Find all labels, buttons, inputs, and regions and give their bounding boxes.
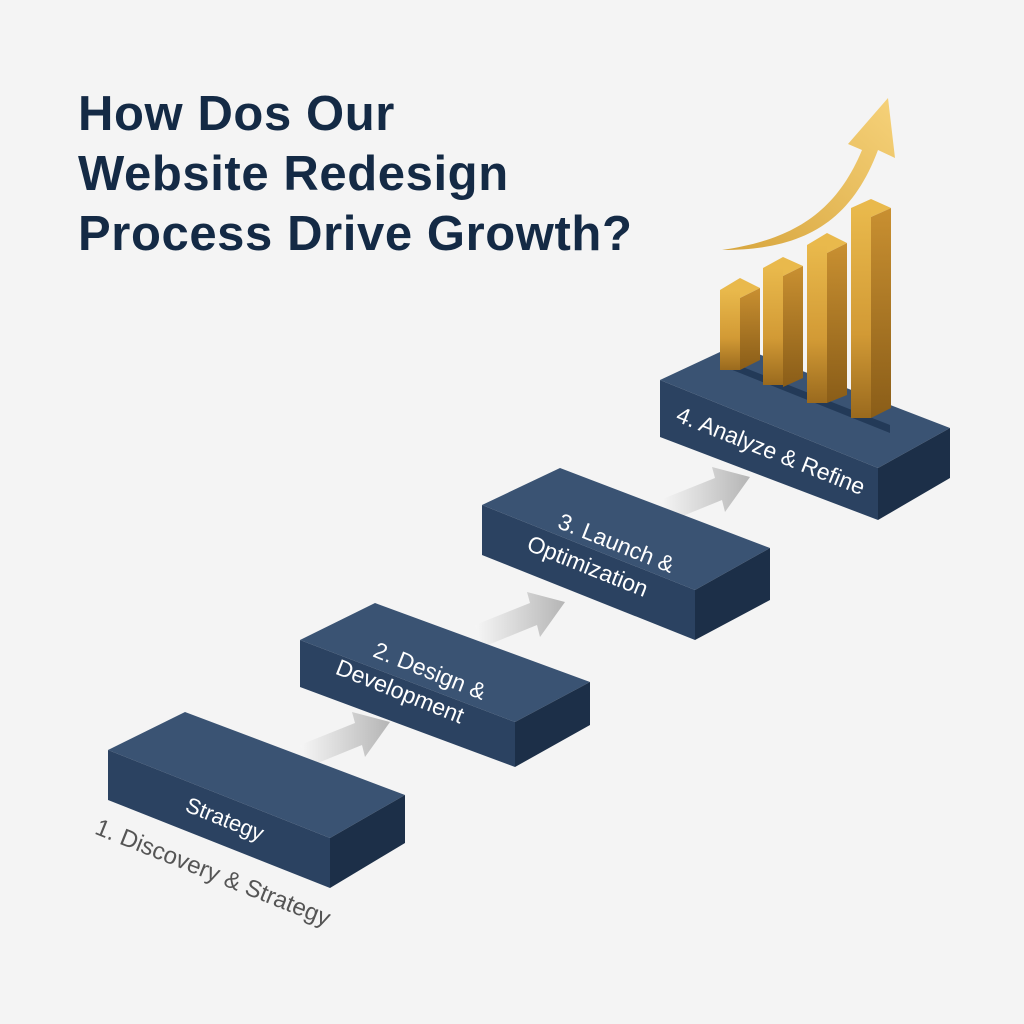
title: Process Drive Growth? bbox=[78, 207, 632, 261]
label: Strategy: Strategy bbox=[182, 792, 267, 846]
title: How Dos Our bbox=[78, 87, 395, 141]
label: Design & Development: Development bbox=[332, 654, 468, 729]
title: Website Redesign bbox=[78, 147, 509, 201]
label: Analyze & Refine: 4. Analyze & Refine bbox=[673, 401, 869, 500]
label: 1. Discovery & Strategy: 1. Discovery & Strategy bbox=[91, 814, 334, 932]
arrow: 2 to 3 bbox=[475, 592, 565, 647]
block 3 bbox=[482, 468, 770, 640]
arrow: 3 to 4 bbox=[660, 467, 750, 522]
label: Design & Development: 2. Design & bbox=[370, 637, 490, 705]
arrow: 1 to 2 bbox=[300, 712, 390, 767]
icon: growth arrow bbox=[722, 98, 895, 250]
block 1 bbox=[108, 712, 405, 888]
bar chart bbox=[720, 199, 891, 433]
label: Launch & Optimization: 3. Launch & bbox=[555, 508, 678, 578]
block 2 bbox=[300, 603, 590, 767]
block 4 bbox=[660, 345, 950, 520]
label: Launch & Optimization: Optimization bbox=[524, 530, 652, 602]
